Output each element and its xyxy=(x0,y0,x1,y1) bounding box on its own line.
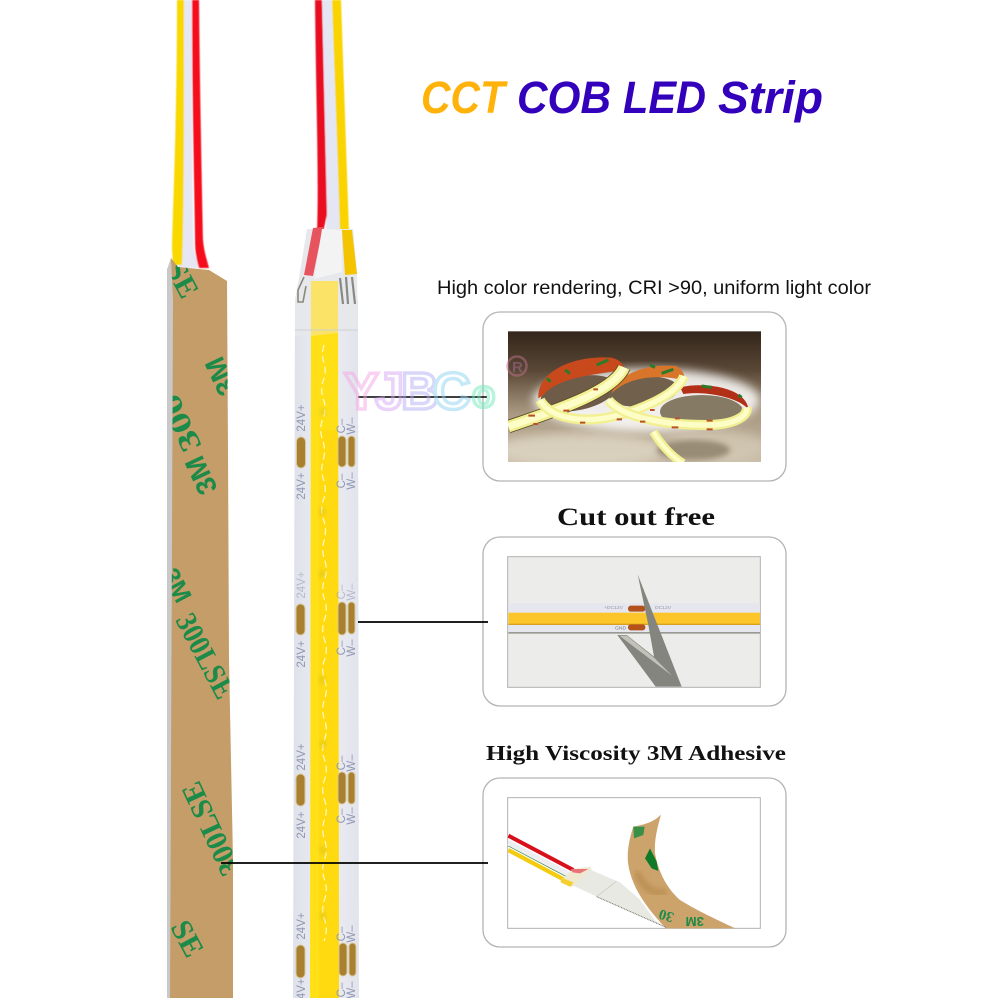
panel: adhesive xyxy=(483,778,786,947)
leader line: colour rendering xyxy=(358,396,487,398)
strip printed labels: C– xyxy=(336,808,348,823)
adhesive backing tape xyxy=(167,258,233,998)
right strip wires xyxy=(315,0,349,232)
strip printed labels: C– xyxy=(336,982,348,997)
panel: colour rendering xyxy=(483,312,786,481)
photo: scissors cutting strip: GND xyxy=(615,625,626,631)
photo: peeled adhesive tape: 30 xyxy=(657,905,676,925)
3M printing on tape: SE xyxy=(164,915,210,963)
heading: high viscosity adhesive: High Viscosity 3M Adhesive xyxy=(486,741,786,765)
strip body xyxy=(293,300,359,998)
warm centre of COB band xyxy=(319,430,339,998)
photo: glowing LED coils xyxy=(508,331,761,462)
3M printing on tape: 300LSE xyxy=(169,608,241,705)
title: COB xyxy=(517,72,611,123)
photo: scissors cutting strip xyxy=(508,557,760,687)
strip printed labels: 24V+ xyxy=(296,912,308,940)
watermark: YJBCo: B xyxy=(401,363,439,421)
leader line: cut out free xyxy=(358,621,488,623)
left strip: wires and adhesive backing xyxy=(167,0,233,998)
left strip wires xyxy=(172,0,209,268)
strip printed labels: C– xyxy=(336,418,348,433)
strip printed labels: 24V+ xyxy=(296,404,308,432)
strip printed labels: W– xyxy=(346,754,358,772)
3M printing on tape: SE xyxy=(159,256,205,304)
3M printing on tape: 300 xyxy=(153,389,208,457)
3M printing on tape: 3M xyxy=(199,352,243,401)
watermark: YJBCo: R xyxy=(512,359,523,376)
title: LED xyxy=(623,72,706,123)
photo: peeled adhesive tape xyxy=(508,798,760,929)
strip printed labels: W– xyxy=(346,417,358,435)
title xyxy=(421,72,823,123)
watermark: YJBCo: o xyxy=(472,374,495,416)
photo: peeled adhesive tape: 3M xyxy=(685,914,704,929)
watermark: YJBCo: C xyxy=(433,363,471,421)
strip printed labels: C– xyxy=(336,755,348,770)
strip printed labels: C– xyxy=(336,640,348,655)
watermark: YJBCo: Y xyxy=(344,363,379,421)
LED chip spots xyxy=(318,408,326,920)
photo: scissors cutting strip: +DC12V xyxy=(604,605,624,611)
caption: colour rendering: High color rendering, CRI >90, uniform light color xyxy=(437,278,872,299)
yellow COB band xyxy=(310,282,339,998)
strip printed labels: 24V+ xyxy=(296,811,308,839)
strip printed labels: 24V+ xyxy=(296,743,308,771)
photo: scissors cutting strip: DC12V xyxy=(655,605,672,611)
3M printing on tape xyxy=(167,264,233,958)
3M printing on tape: 3M xyxy=(156,564,197,607)
strip printed labels: W– xyxy=(346,639,358,657)
watermark: YJBCo xyxy=(344,356,526,421)
heading: cut out free: Cut out free xyxy=(557,502,715,531)
dashed wire on band xyxy=(321,345,326,941)
strip printed labels: 24V+ xyxy=(296,571,308,599)
3M printing on tape: 300LSE xyxy=(175,776,247,881)
strip printed labels: W– xyxy=(346,583,358,601)
leader line: adhesive xyxy=(221,862,488,864)
strip printed labels: 24V+ xyxy=(296,472,308,500)
right strip: wires, connector and COB LED xyxy=(293,0,359,998)
solder pads xyxy=(296,436,356,978)
strip printed labels: W– xyxy=(346,472,358,490)
strip printed labels: C– xyxy=(336,926,348,941)
tape silver left edge xyxy=(167,258,173,998)
strip printed labels: W– xyxy=(346,925,358,943)
strip printed labels: C– xyxy=(336,473,348,488)
strip printed labels xyxy=(296,404,358,998)
title: Strip xyxy=(718,72,823,123)
strip printed labels: 24V+ xyxy=(296,640,308,668)
clear connector housing xyxy=(295,227,358,336)
strip printed labels: W– xyxy=(346,807,358,825)
strip printed labels: C– xyxy=(336,584,348,599)
title: CCT xyxy=(421,72,508,123)
watermark: YJBCo: J xyxy=(375,363,404,421)
3M printing on tape: 3M xyxy=(179,451,223,500)
panel: cut out free xyxy=(483,537,786,706)
